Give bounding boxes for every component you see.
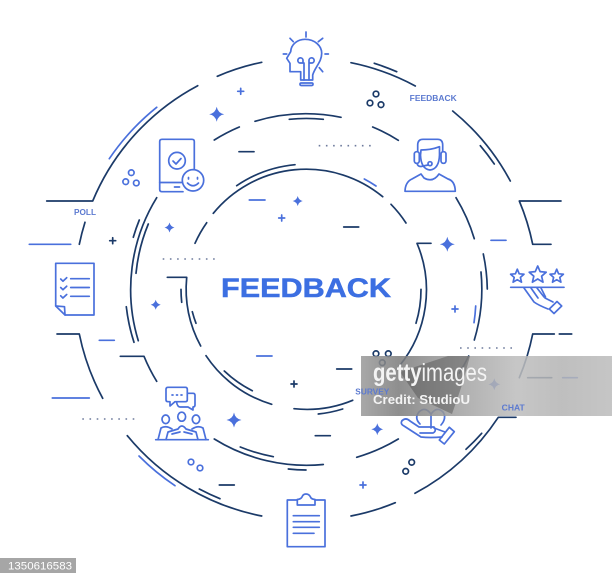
middle ring blue accent <box>474 306 476 323</box>
small circles <box>123 91 415 474</box>
inner ring blue accents <box>249 179 376 356</box>
label: chat: CHAT <box>502 403 525 412</box>
sparkles <box>151 107 500 435</box>
inner ring segments <box>167 165 431 414</box>
icon: meeting group with chat bubbles <box>156 387 208 440</box>
icon: hand holding heart <box>401 409 454 444</box>
dark plus marks <box>110 238 297 387</box>
icon: clipboard <box>287 494 325 547</box>
icon: headset agent <box>405 139 455 191</box>
watermark panel <box>361 356 612 416</box>
image id tag: 1350616583 <box>8 560 72 572</box>
icon: lightbulb with head <box>283 32 328 86</box>
label: poll: POLL <box>74 208 96 217</box>
image id tag <box>0 558 76 573</box>
dotted lines <box>82 146 516 419</box>
outer ring blue accents <box>29 107 577 486</box>
watermark credit: Credit: StudioU <box>373 392 470 407</box>
icon: checklist document <box>56 263 94 315</box>
icon: phone with check and smiley <box>160 139 204 192</box>
watermark logo: gettyimages <box>373 359 487 387</box>
icon: rating stars on a hand tray <box>511 266 564 314</box>
label: feedback: FEEDBACK <box>410 94 457 103</box>
small plus marks <box>238 88 458 488</box>
outer ring segments <box>47 62 572 516</box>
middle ring segments <box>120 114 487 485</box>
title: FEEDBACK <box>221 273 392 303</box>
label: survey: SURVEY <box>355 387 390 396</box>
